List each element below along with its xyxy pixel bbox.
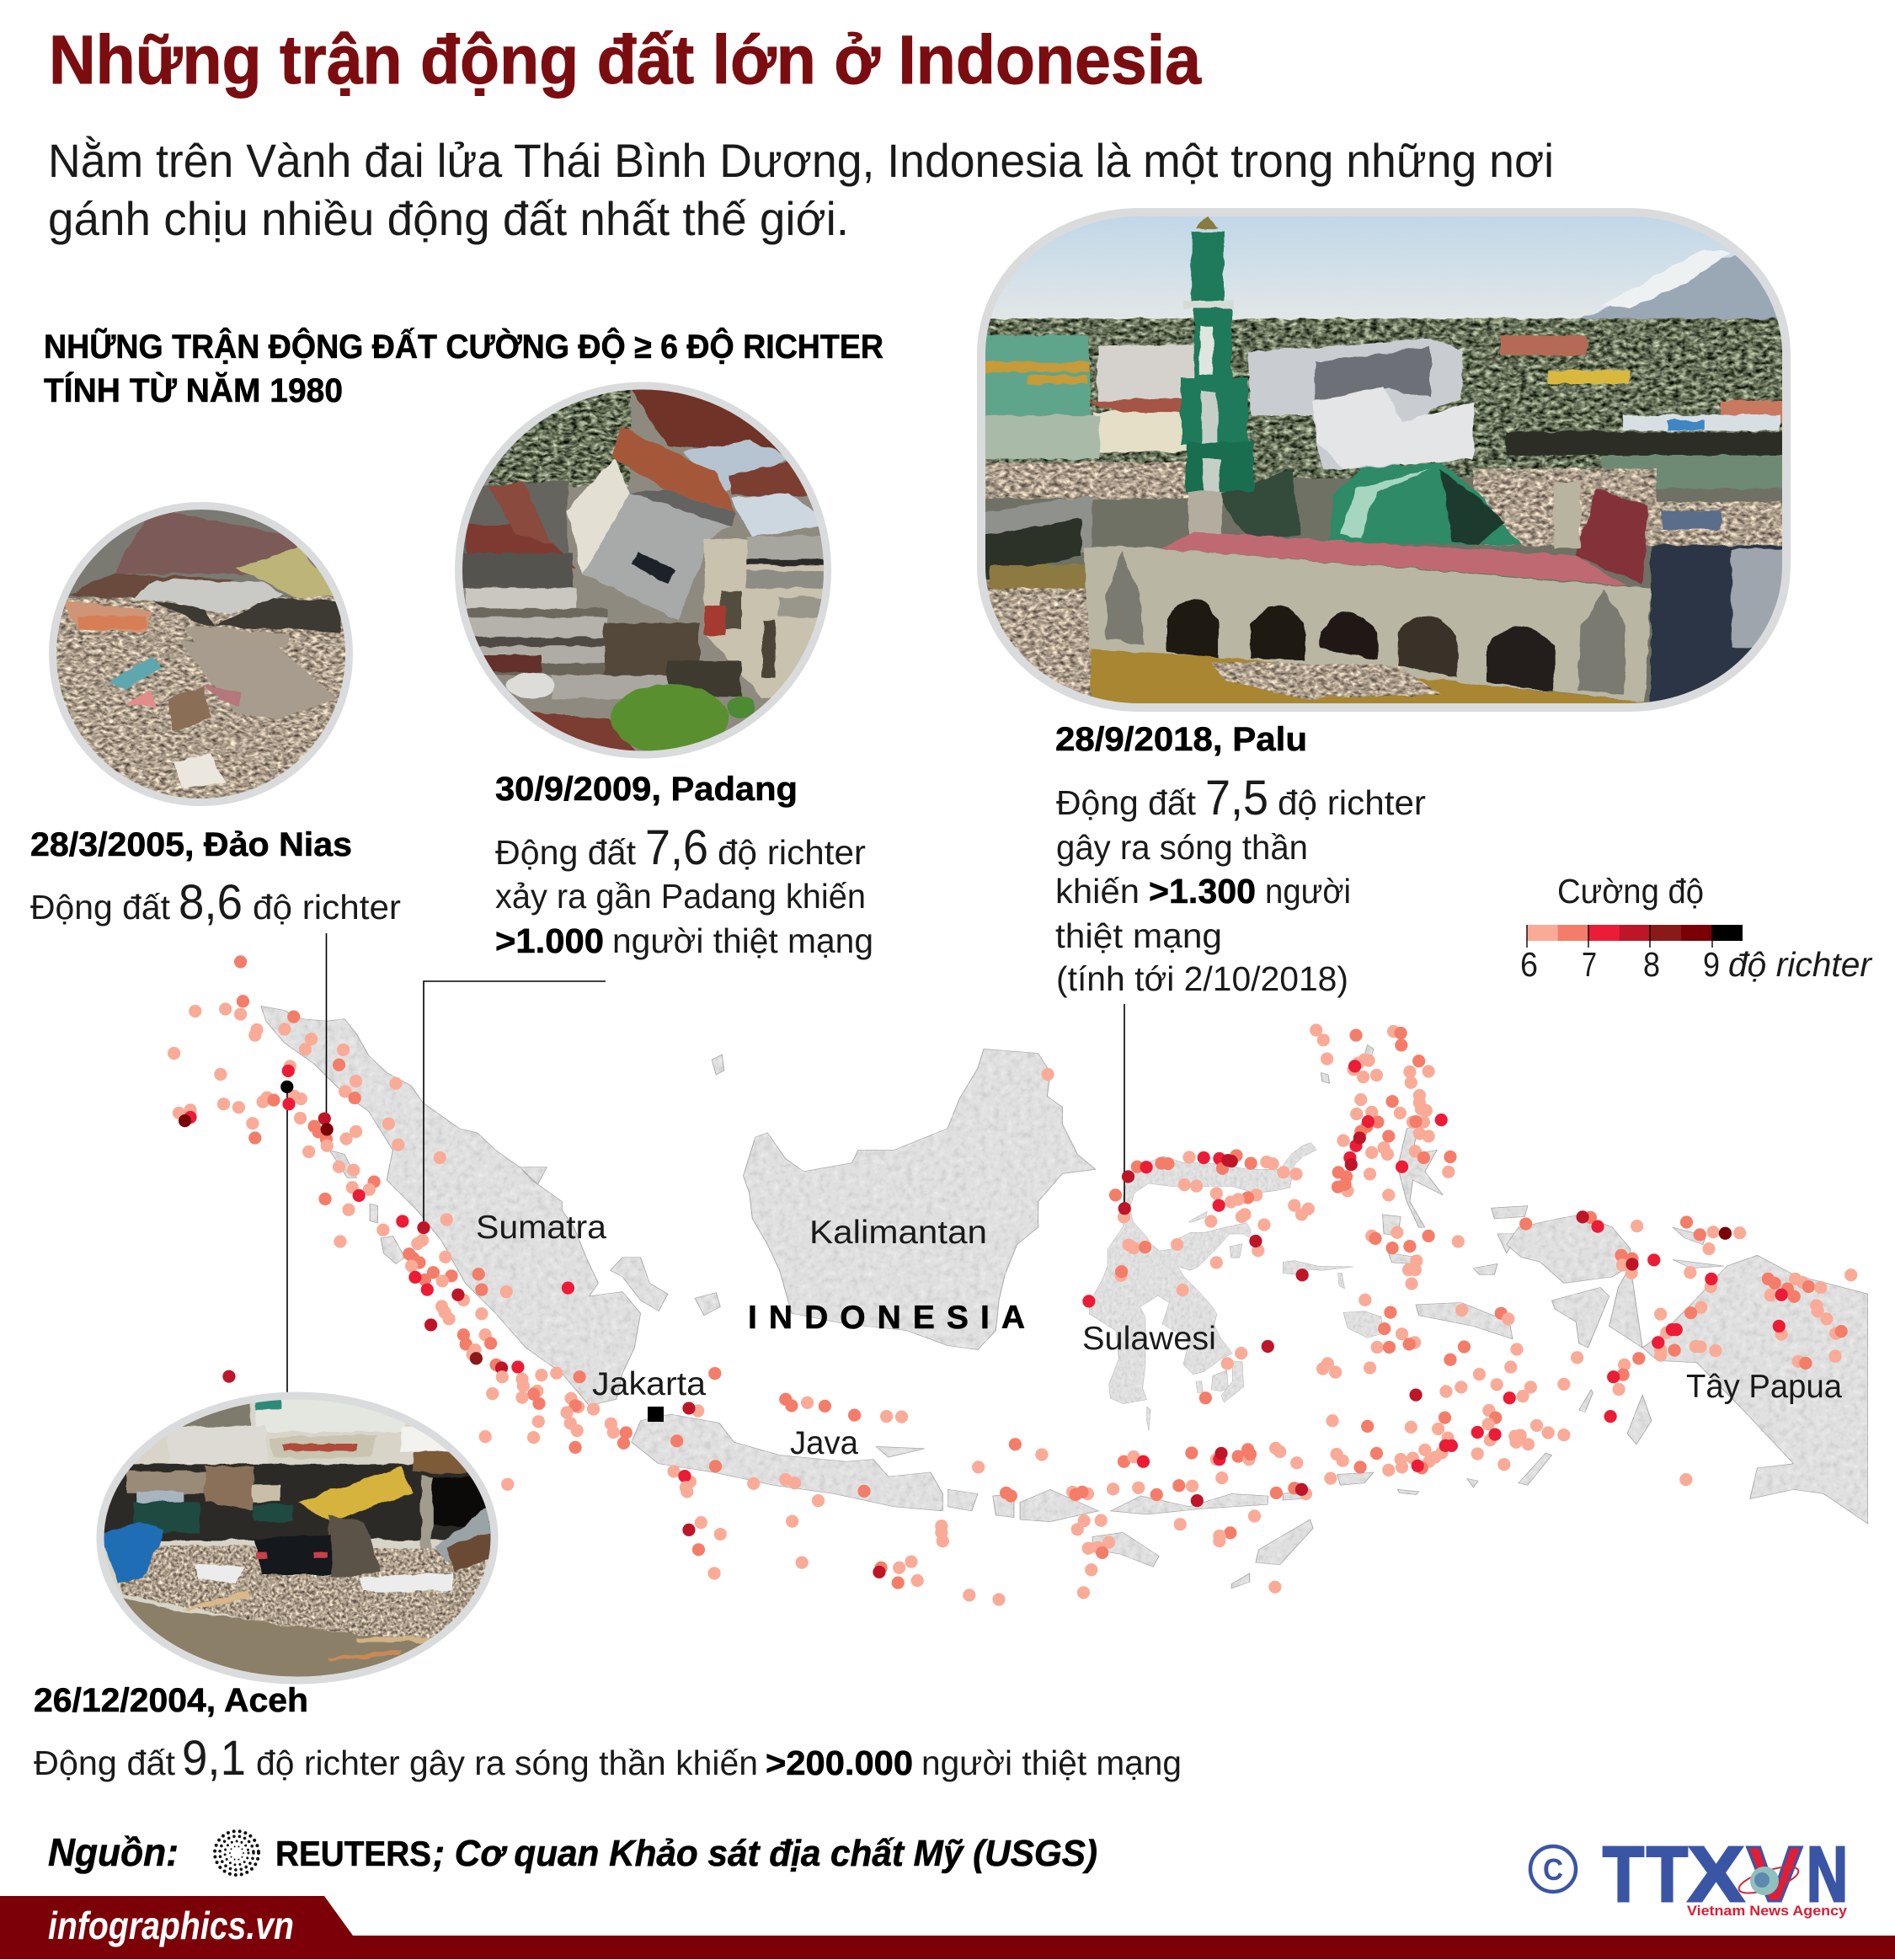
caption: Palu 2018: (tính tới 2/10/2018)	[1056, 959, 1348, 998]
intro text	[48, 134, 1554, 245]
caption: Aceh 2004: Động đất	[34, 1744, 176, 1782]
logo: TTXVN: T	[1647, 1830, 1688, 1918]
caption: Padang 2009: >1.000	[495, 921, 604, 960]
source line: REUTERS	[275, 1834, 431, 1873]
photo: Palu mosque	[969, 202, 1811, 725]
legend: magnitude scale	[1520, 872, 1873, 984]
map labels: Sulawesi	[1082, 1321, 1216, 1357]
map labels: Sumatra	[476, 1210, 606, 1246]
photo: Aceh tsunami debris	[84, 1390, 499, 1690]
legend: magnitude scale: 8	[1643, 945, 1660, 984]
caption: Aceh 2004: 9,1	[182, 1731, 246, 1786]
caption: Palu 2018: gây ra sóng thần	[1056, 828, 1308, 867]
caption: Aceh 2004	[34, 1682, 1182, 1786]
map labels: Jakarta	[592, 1366, 706, 1402]
caption: Nias 2005: độ richter	[253, 888, 401, 927]
legend: magnitude scale: độ richter	[1728, 945, 1873, 984]
source line	[48, 1830, 1097, 1875]
marker: Jakarta	[648, 1407, 664, 1422]
caption: Palu 2018: >1.300	[1149, 872, 1256, 911]
map of Indonesia	[168, 933, 1868, 1606]
caption: Palu 2018	[1055, 721, 1426, 998]
caption: Nias 2005: Động đất	[30, 888, 171, 927]
logo: TTXVN: T	[1603, 1830, 1644, 1918]
land masses east	[948, 1044, 1868, 1589]
logo: TTXVN: X	[1688, 1830, 1744, 1918]
photo: Padang collapsed building	[451, 379, 835, 762]
leader lines	[287, 933, 1124, 1398]
heading: earthquakes since 1980: NHỮNG TRẬN ĐỘNG ĐẤT CƯỜNG ĐỘ ≥ 6 ĐỘ RICHTER	[44, 327, 883, 366]
caption: Padang 2009: người thiệt mạng	[612, 921, 873, 960]
caption: Palu 2018: thiệt mạng	[1055, 916, 1222, 955]
caption: Nias 2005	[30, 826, 401, 930]
logo: TTXVN: V	[1747, 1830, 1802, 1918]
legend: magnitude scale: Cường độ	[1557, 872, 1704, 911]
logo: TTXVN: Vietnam News Agency	[1687, 1903, 1848, 1919]
legend: magnitude scale: 7	[1582, 945, 1597, 984]
caption: Nias 2005: 8,6	[179, 875, 243, 930]
caption: Padang 2009: 7,6	[645, 820, 708, 875]
caption: Palu 2018: độ richter	[1278, 783, 1426, 822]
title: Những trận động đất lớn ở Indonesia	[49, 22, 1202, 99]
heading: earthquakes since 1980: TÍNH TỪ NĂM 1980	[44, 371, 343, 409]
earthquake dots west	[168, 955, 949, 1589]
caption: Nias 2005: 28/3/2005, Đảo Nias	[30, 826, 352, 863]
footer banner	[0, 1896, 1895, 1959]
photo: Nias rubble	[46, 501, 362, 811]
caption: Aceh 2004: 26/12/2004, Aceh	[34, 1682, 308, 1719]
logo: TTXVN: N	[1807, 1830, 1848, 1918]
land: Sulawesi and nearby islands	[1089, 1143, 1383, 1430]
caption: Palu 2018: khiến	[1055, 872, 1140, 911]
earthquake dots east	[963, 1023, 1857, 1606]
icon: copyright mark: C	[1543, 1852, 1563, 1887]
caption: Palu 2018: 7,5	[1205, 771, 1268, 825]
caption: Aceh 2004: độ richter gây ra sóng thần khiến	[256, 1744, 758, 1782]
caption: Padang 2009: 30/9/2009, Padang	[495, 771, 798, 808]
logo: TTXVN	[1530, 1830, 1848, 1919]
intro text: Nằm trên Vành đai lửa Thái Bình Dương, Indonesia là một trong những nơi	[48, 134, 1554, 187]
caption: Palu 2018: 28/9/2018, Palu	[1055, 721, 1307, 758]
caption: Padang 2009: độ richter	[718, 833, 866, 872]
caption: Padang 2009	[495, 771, 873, 960]
map labels: Tây Papua	[1686, 1369, 1842, 1405]
caption: Palu 2018: Động đất	[1056, 783, 1197, 822]
caption: Aceh 2004: người thiệt mạng	[921, 1744, 1182, 1782]
map labels: INDONESIA	[748, 1300, 1025, 1336]
legend: magnitude scale: 6	[1520, 945, 1538, 984]
heading: earthquakes since 1980	[44, 327, 883, 409]
caption: Aceh 2004: >200.000	[766, 1744, 913, 1782]
source line: ; Cơ quan Khảo sát địa chất Mỹ (USGS)	[433, 1833, 1097, 1874]
caption: Padang 2009: Động đất	[495, 833, 637, 872]
map labels	[476, 1210, 1842, 1461]
caption: Palu 2018: người	[1265, 872, 1351, 911]
intro text: gánh chịu nhiều động đất nhất thế giới.	[48, 192, 849, 245]
caption: Padang 2009: xảy ra gần Padang khiến	[495, 877, 866, 916]
legend: magnitude scale: 9	[1703, 945, 1720, 984]
map labels: Kalimantan	[809, 1215, 987, 1251]
source line: Nguồn:	[48, 1830, 179, 1874]
icon: copyright mark	[1530, 1846, 1576, 1892]
footer banner: infographics.vn	[48, 1904, 294, 1947]
icon: Reuters dot logo	[215, 1831, 259, 1875]
map labels: Java	[790, 1425, 858, 1461]
land masses west	[261, 1006, 1096, 1511]
